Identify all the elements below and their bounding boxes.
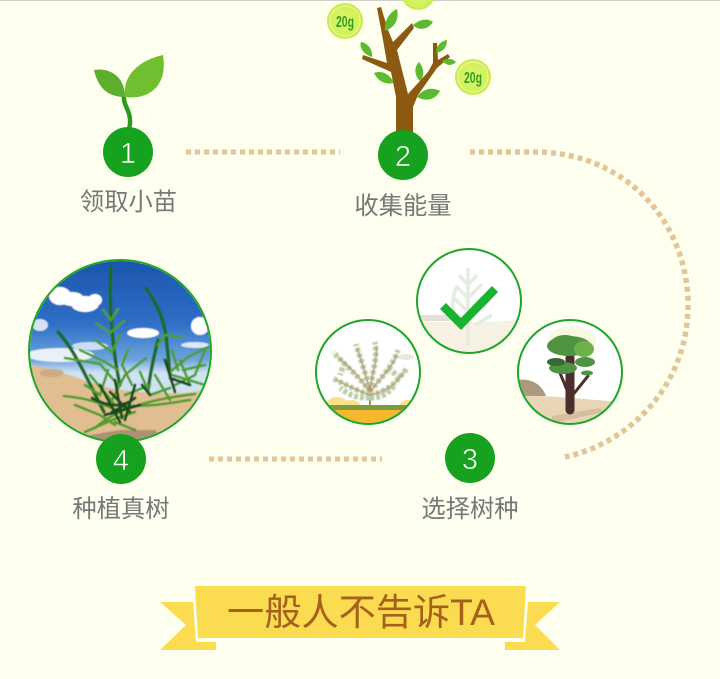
step 3 badge	[445, 433, 495, 483]
step 4 badge: 4	[113, 445, 129, 477]
label: step 4: 种植真树	[72, 496, 170, 523]
illustration: tree with energy coins	[327, 0, 491, 132]
trunk and branches	[362, 7, 450, 132]
dotted connector: step 2 curving to step 3	[470, 152, 688, 457]
step 2 badge: 2	[395, 141, 411, 173]
step 1 badge	[103, 127, 153, 177]
banner text: 一般人不告诉TA	[227, 591, 495, 633]
plant dense dark core	[92, 360, 190, 422]
icon: check mark	[443, 289, 495, 324]
energy coin left	[327, 3, 363, 39]
sand	[31, 364, 201, 440]
ribbon banner	[160, 585, 560, 650]
option circle: selected with check mark	[415, 249, 522, 355]
option circle: tree on dry land	[518, 320, 622, 426]
label: step 1: 领取小苗	[80, 189, 177, 216]
step 4 badge	[96, 434, 146, 484]
icon: seedling	[94, 55, 164, 130]
plant light branches	[64, 309, 210, 432]
energy coin right	[455, 59, 491, 95]
option circle: shrub	[316, 320, 420, 426]
clouds	[26, 287, 209, 362]
plant stems	[58, 267, 170, 412]
step 3 badge: 3	[462, 444, 478, 476]
label: step 2: 收集能量	[354, 193, 452, 220]
dotted connector: step 3 to step 4	[209, 456, 382, 462]
energy coin left: 20g	[336, 14, 354, 31]
energy coin top	[401, 0, 435, 10]
energy coin right: 20g	[464, 70, 482, 87]
step 2 badge	[378, 130, 428, 180]
label: step 3: 选择树种	[421, 496, 519, 523]
photo: desert plant in circle	[26, 260, 212, 445]
dotted connector: step 1 to step 2	[186, 150, 340, 154]
step 1 badge: 1	[120, 138, 136, 170]
leaves	[360, 9, 456, 100]
